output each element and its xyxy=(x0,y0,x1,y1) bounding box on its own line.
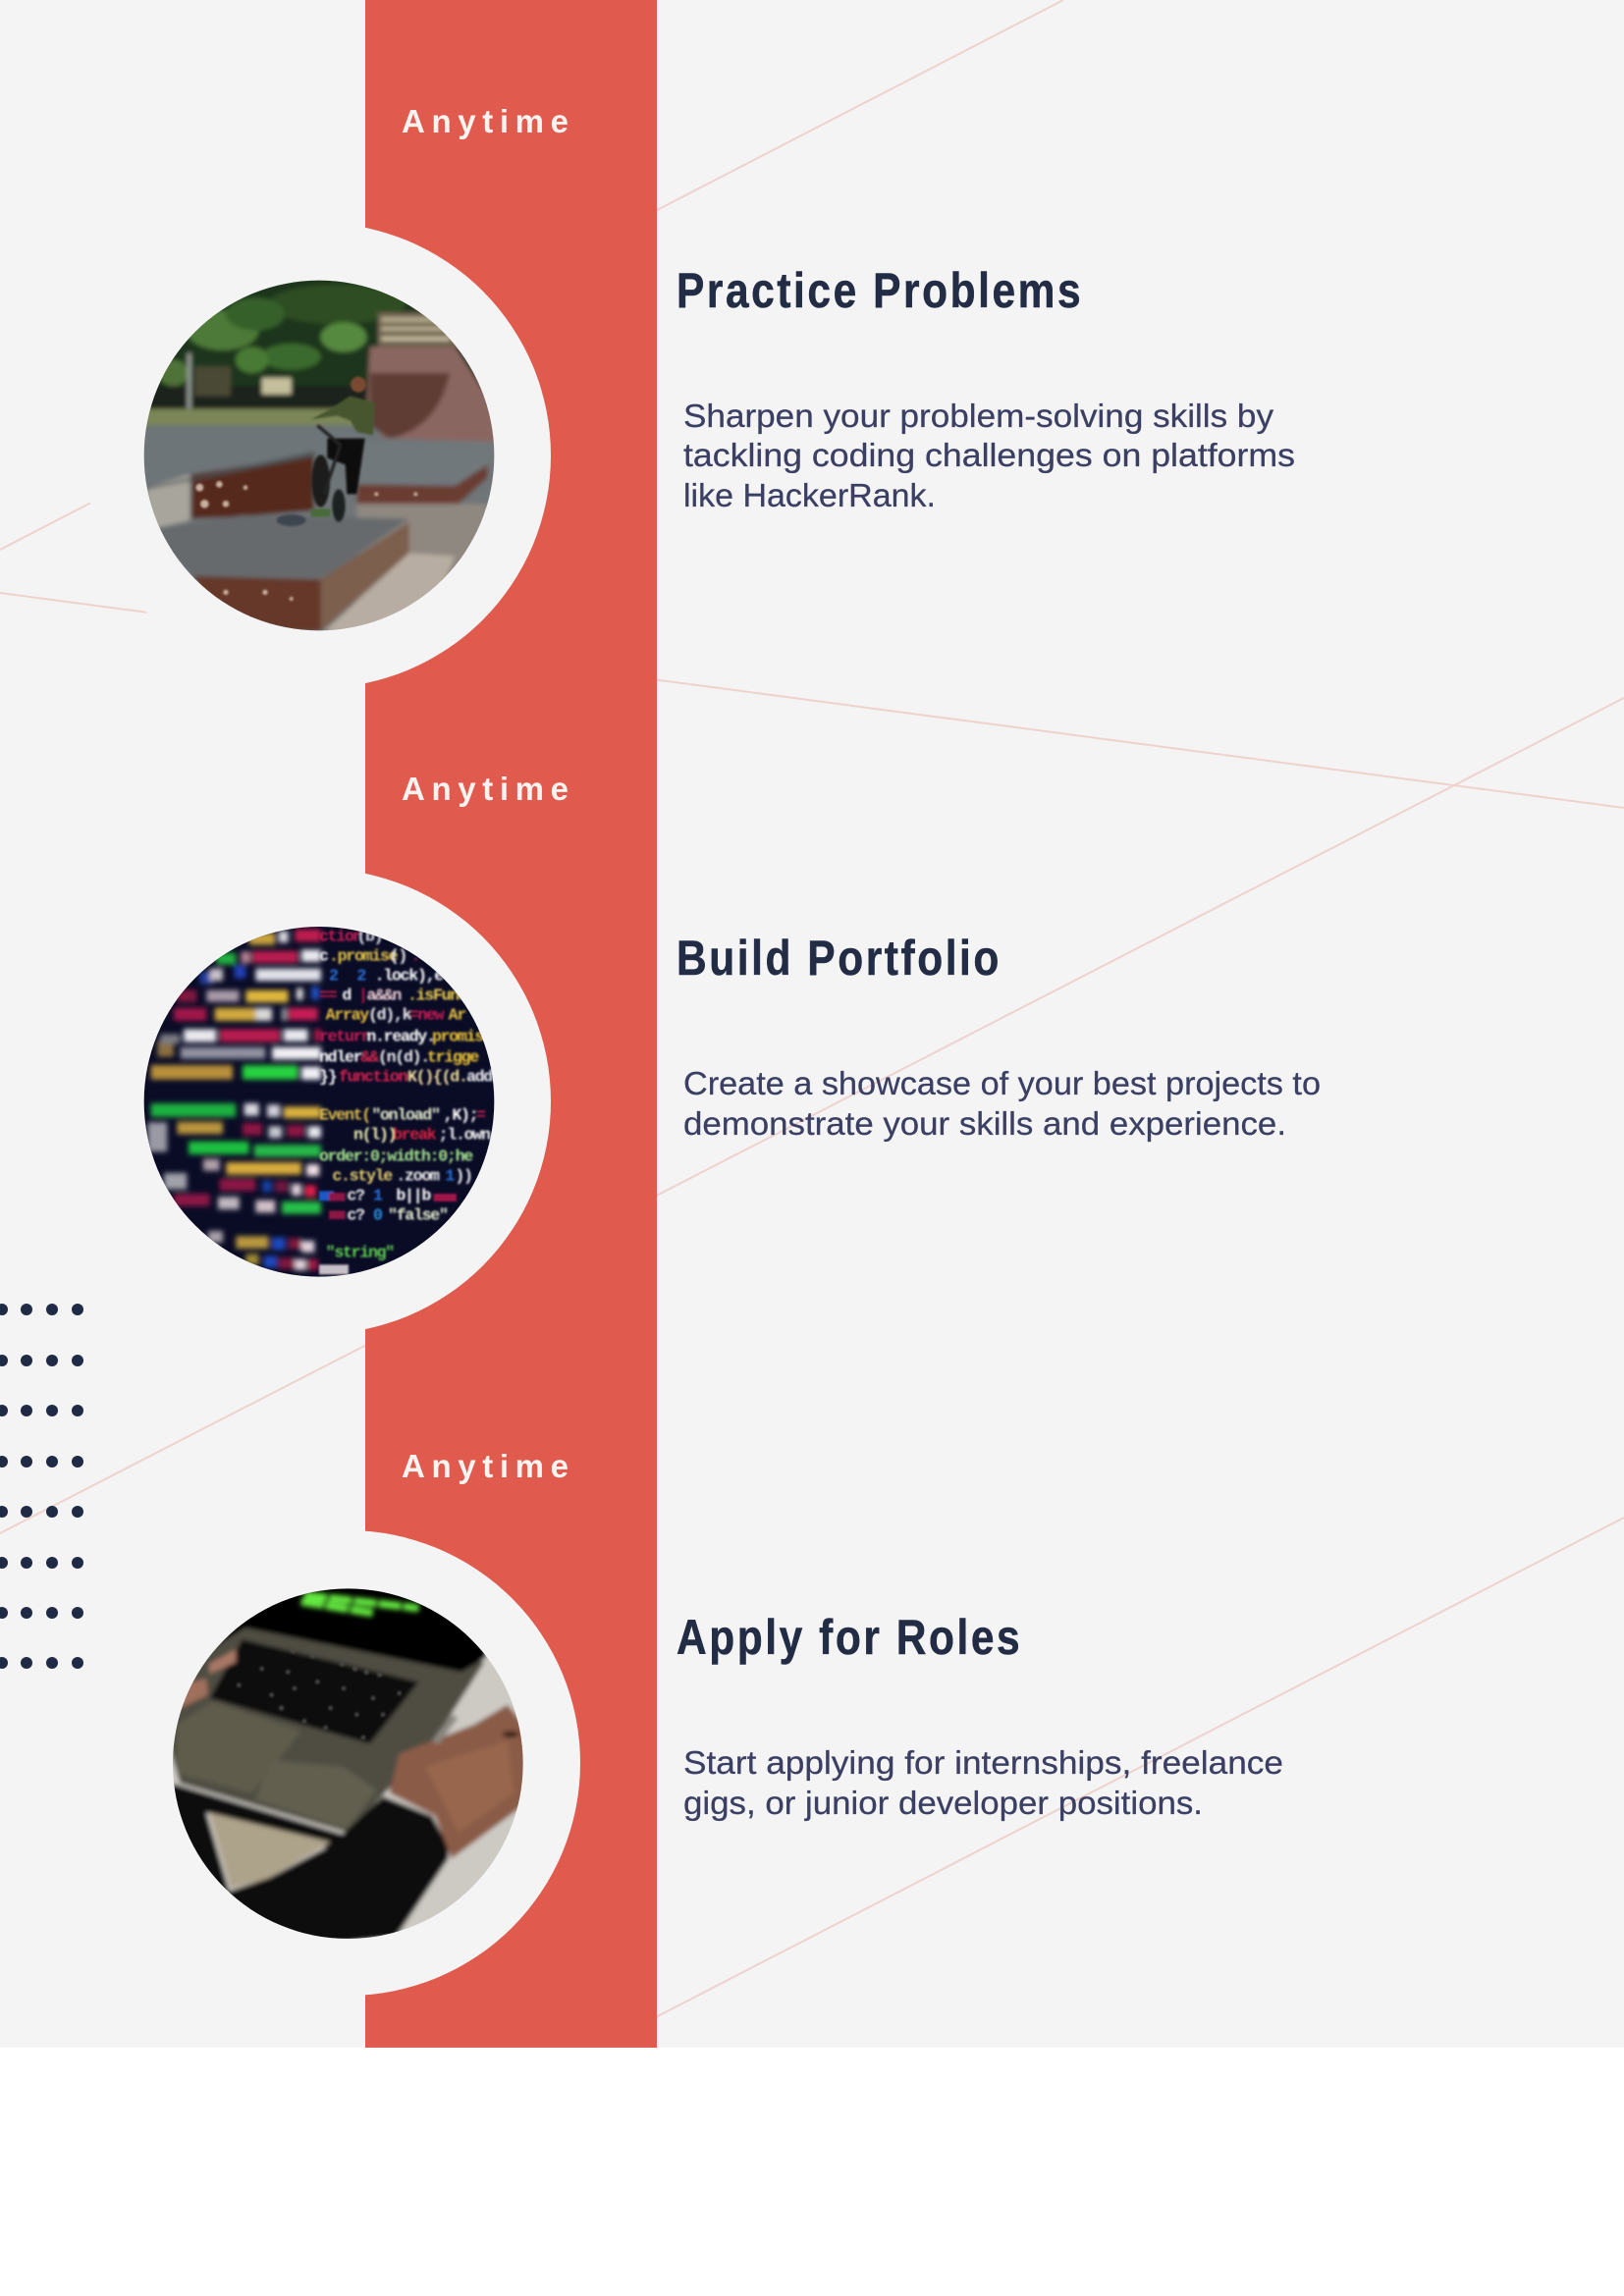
photo: blurred source code on screen: c xyxy=(319,947,329,966)
photo: BMX rider at skate park xyxy=(143,281,495,630)
label: Anytime 3: Anytime xyxy=(402,1448,568,1484)
body text: like HackerRank. xyxy=(683,477,936,513)
photo: blurred source code on screen: Ar xyxy=(449,1006,465,1025)
label: Anytime 1: Anytime xyxy=(402,103,568,139)
red vertical timeline bar with circular cutouts xyxy=(85,0,657,2048)
photo: blurred source code on screen: c.style xyxy=(332,1167,393,1186)
photo: blurred source code on screen: .promise xyxy=(329,947,399,966)
body text: Create a showcase of your best projects to xyxy=(683,1065,1321,1101)
heading: Build Portfolio: Build Portfolio xyxy=(677,931,1001,986)
photo: blurred source code on screen: (n(d). xyxy=(378,1048,429,1067)
photo: blurred source code on screen: 0 xyxy=(373,1206,383,1225)
photo: blurred source code on screen: .isFunc xyxy=(407,987,468,1005)
photo: blurred source code on screen: "onload" xyxy=(371,1107,440,1126)
photo: blurred source code on screen: promis xyxy=(432,1028,483,1046)
photo: blurred source code on screen: 1 xyxy=(373,1187,383,1205)
photo: blurred source code on screen: trigge xyxy=(427,1048,479,1067)
photo: blurred source code on screen: ndler xyxy=(319,1048,362,1067)
photo: blurred source code on screen: n.ready. xyxy=(366,1028,435,1046)
photo: blurred source code on screen: .zoom xyxy=(396,1167,440,1186)
photo: blurred source code on screen: c? xyxy=(347,1187,365,1205)
photo: blurred source code on screen: (d),k xyxy=(368,1006,412,1025)
photo: blurred source code on screen: c? xyxy=(347,1206,365,1225)
photo: blurred source code on screen: Array xyxy=(326,1006,369,1025)
photo: blurred source code on screen: = xyxy=(476,1107,486,1126)
photo: blurred source code on screen: n(l)) xyxy=(353,1127,396,1146)
photo: blurred source code on screen: d xyxy=(342,987,351,1005)
body text: tackling coding challenges on platforms xyxy=(683,437,1295,473)
photo: blurred source code on screen: && xyxy=(360,1048,379,1067)
panel: Build Portfolio xyxy=(128,771,1321,1306)
photo: blurred source code on screen: ction xyxy=(319,928,362,946)
photo: blurred source code on screen: function xyxy=(339,1068,407,1087)
photo: blurred source code on screen: add xyxy=(466,1068,492,1087)
photo: blurred source code on screen: =new xyxy=(409,1006,445,1025)
photo: blurred source code on screen: "string" xyxy=(326,1245,394,1263)
photo: blurred source code on screen: 1 xyxy=(445,1167,455,1186)
photo: blurred source code on screen: 2 xyxy=(329,967,339,986)
decorative dot grid xyxy=(0,1304,83,1669)
photo: blurred source code on screen: break xyxy=(393,1127,437,1146)
body text xyxy=(683,1065,1321,1142)
photo: blurred source code on screen: return xyxy=(319,1028,370,1046)
photo: blurred source code on screen: == xyxy=(319,987,338,1005)
photo: blurred source code on screen: (b) xyxy=(356,928,382,946)
photo: blurred source code on screen: }} xyxy=(319,1068,337,1087)
panel: Apply for Roles xyxy=(173,1454,1282,1939)
photo: blurred source code on screen: b||b xyxy=(396,1187,431,1205)
photo: blurred source code on screen: () xyxy=(390,947,406,966)
body text: Sharpen your problem-solving skills by xyxy=(683,398,1274,434)
body text xyxy=(683,398,1295,513)
body text: gigs, or junior developer positions. xyxy=(683,1785,1203,1821)
photo: blurred source code on screen: a&&n xyxy=(366,987,401,1005)
photo: hands on laptop keyboard xyxy=(173,1588,523,1939)
heading: Practice Problems: Practice Problems xyxy=(677,263,1083,318)
panel: Practice Problems xyxy=(128,103,1295,658)
photo: blurred source code on screen xyxy=(143,927,495,1277)
photo: blurred source code on screen: order:0;width:0;he xyxy=(319,1148,473,1166)
photo: blurred source code on screen: )) xyxy=(455,1167,472,1186)
heading: Apply for Roles: Apply for Roles xyxy=(677,1610,1022,1665)
photo: blurred source code on screen: 2 xyxy=(356,967,366,986)
body text: demonstrate your skills and experience. xyxy=(683,1105,1286,1142)
photo: blurred source code on screen: "false" xyxy=(388,1206,448,1225)
photo: blurred source code on screen: .lock),e xyxy=(375,967,444,986)
photo: blurred source code on screen: K(){(d. xyxy=(407,1068,467,1087)
photo: blurred source code on screen: : xyxy=(410,947,419,966)
body text xyxy=(683,1744,1283,1821)
photo: blurred source code on screen: ,K); xyxy=(444,1107,477,1126)
body text: Start applying for internships, freelance xyxy=(683,1744,1283,1781)
photo: blurred source code on screen: | xyxy=(358,987,367,1005)
photo: blurred source code on screen: Event( xyxy=(319,1107,370,1126)
label: Anytime 2: Anytime xyxy=(402,771,568,807)
photo: blurred source code on screen: ;l.own xyxy=(439,1127,490,1146)
